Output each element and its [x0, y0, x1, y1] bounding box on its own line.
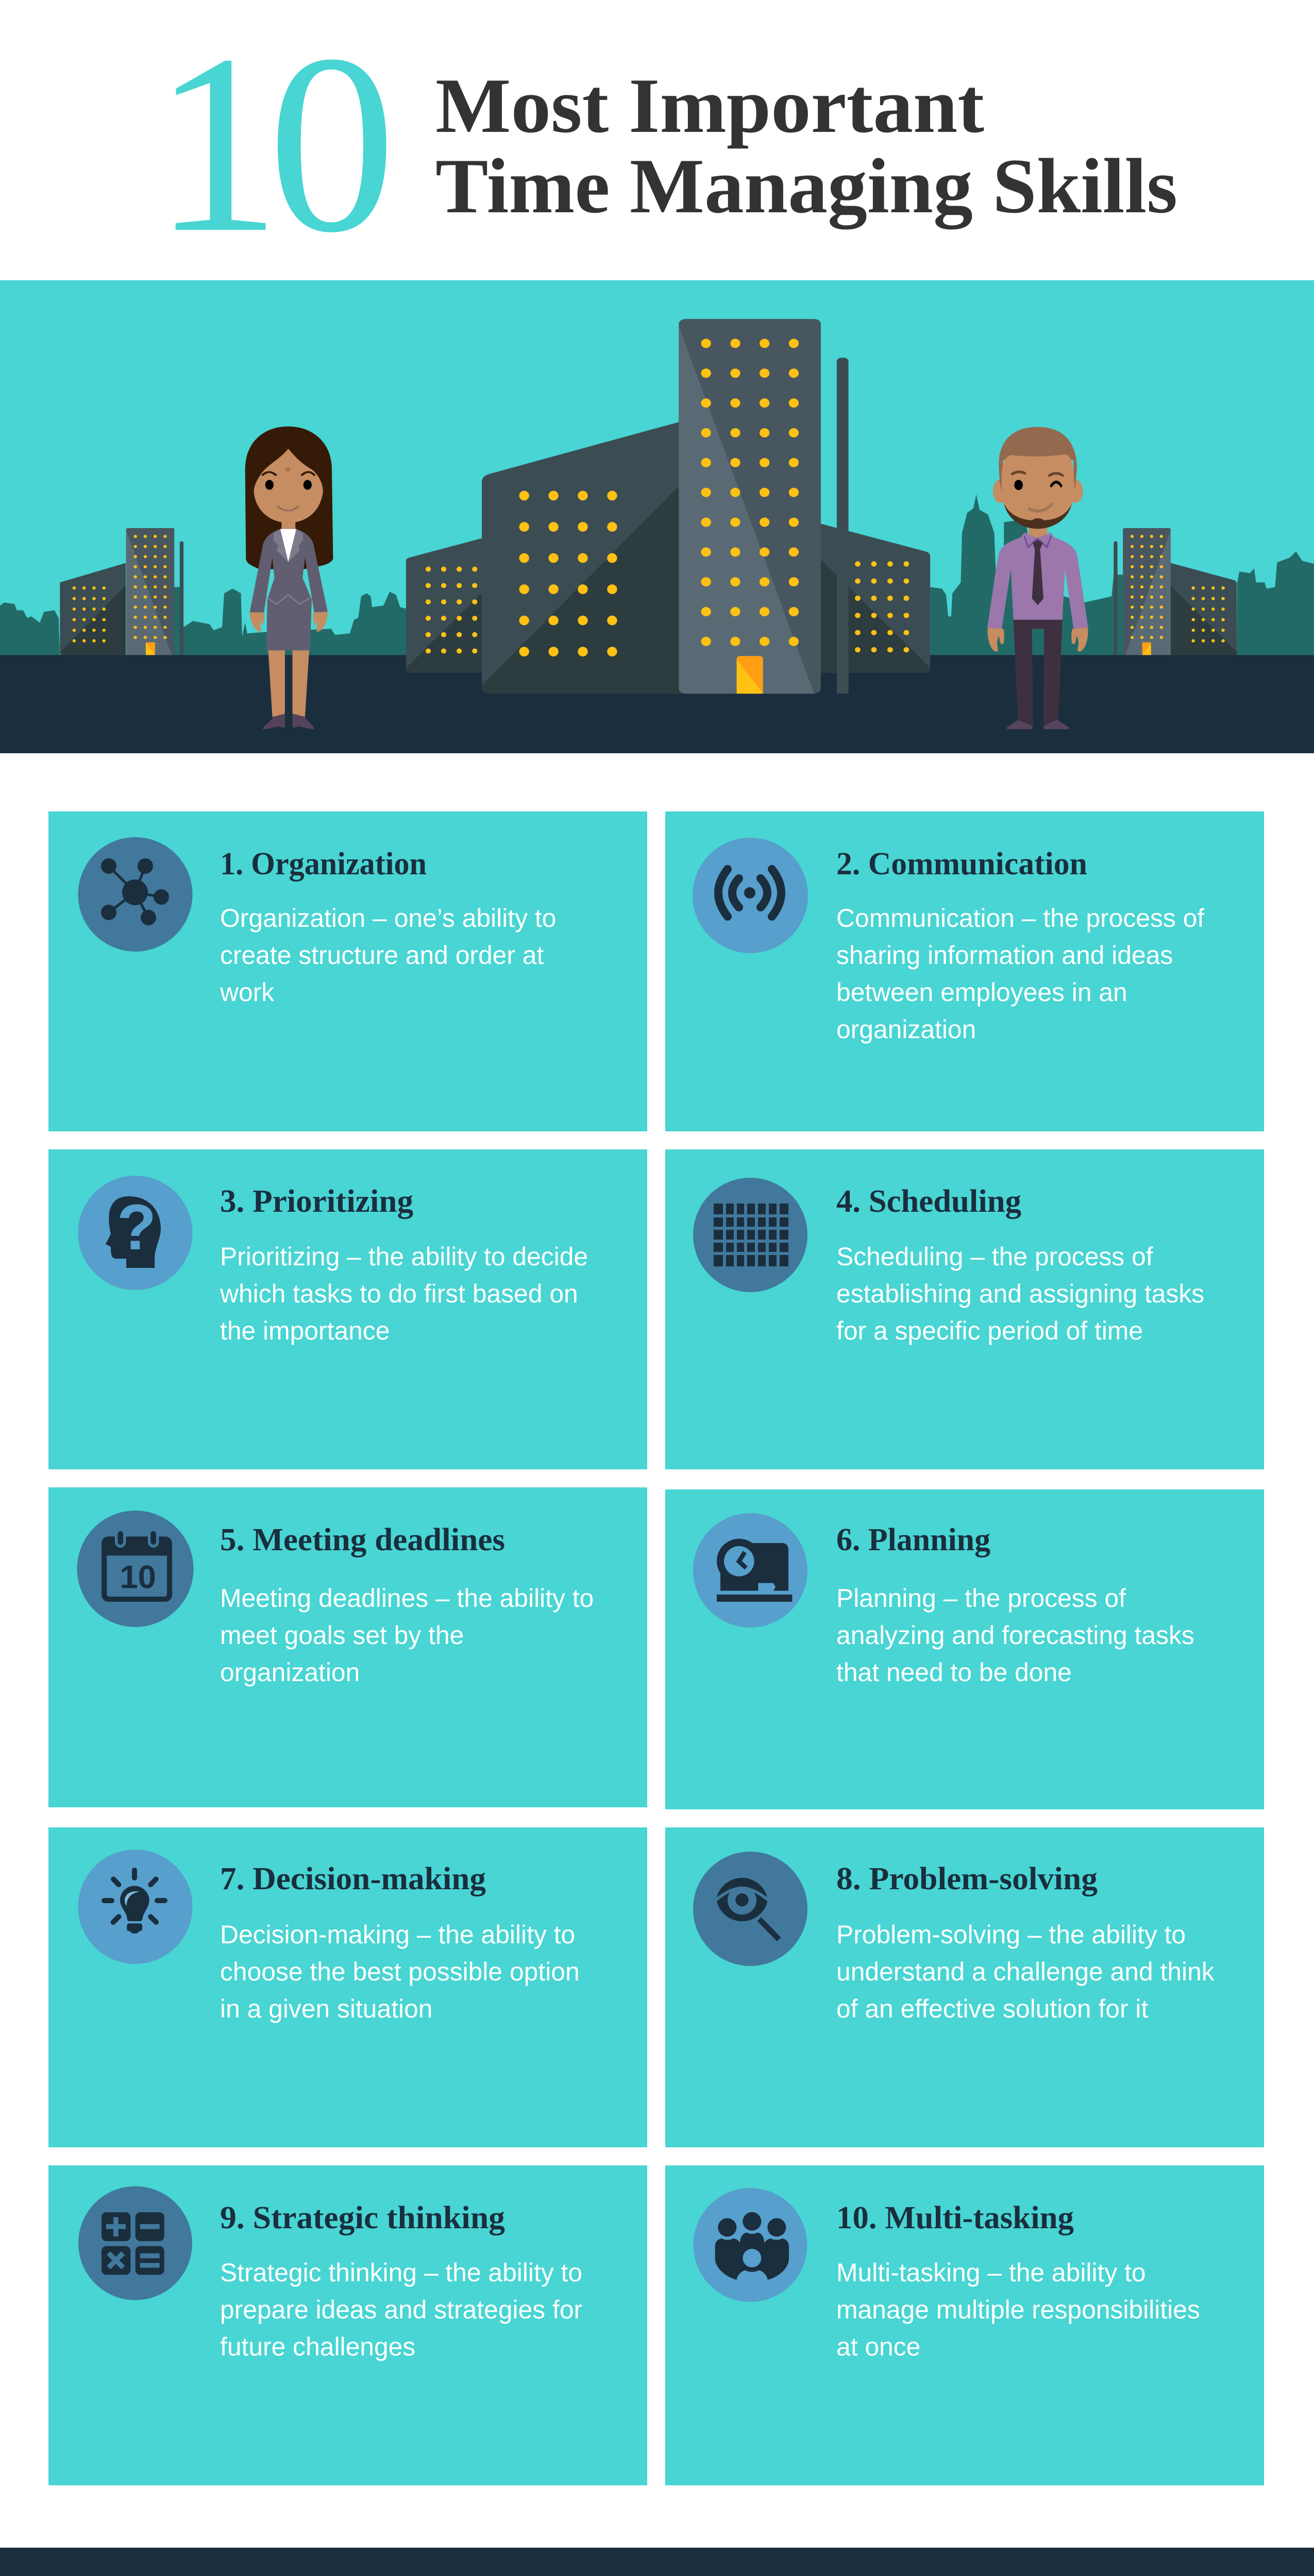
body text: Prioritizing – the ability to decide	[220, 1242, 588, 1271]
card 1: Organization	[48, 811, 647, 1131]
body text: analyzing and forecasting tasks	[836, 1621, 1194, 1650]
body text: Communication – the process of	[836, 904, 1204, 933]
shirt	[987, 533, 1088, 629]
body text: Organization – one’s ability to	[220, 904, 556, 933]
heading: 2. Communication	[836, 846, 1087, 882]
smile	[1029, 504, 1052, 511]
title line 2: Time Managing Skills	[435, 143, 1177, 230]
body text: sharing information and ideas	[836, 941, 1173, 970]
small tower right	[1123, 528, 1171, 655]
body text: meet goals set by the	[220, 1621, 464, 1650]
suit	[250, 529, 328, 650]
title	[153, 2, 1177, 285]
footer	[0, 2548, 1314, 2576]
body text: establishing and assigning tasks	[836, 1279, 1204, 1308]
low building right of tower	[816, 522, 930, 673]
tower door	[736, 656, 763, 693]
body text: organization	[220, 1658, 360, 1687]
body text: at once	[836, 2332, 920, 2361]
shoes	[1006, 720, 1069, 729]
collar	[1024, 536, 1051, 547]
body text: of an effective solution for it	[836, 1994, 1148, 2023]
icon: network	[78, 837, 193, 952]
body text: Decision-making – the ability to	[220, 1920, 575, 1949]
card 9: Strategic thinking	[48, 2165, 647, 2485]
heading: 4. Scheduling	[836, 1184, 1021, 1219]
woman character	[245, 427, 333, 729]
tall pole	[837, 358, 849, 693]
small low building right	[1171, 563, 1237, 655]
brows	[1012, 472, 1063, 476]
card 8: Problem-solving	[665, 1827, 1264, 2147]
body text: Problem-solving – the ability to	[836, 1920, 1186, 1949]
body text: manage multiple responsibilities	[836, 2295, 1200, 2324]
face	[1002, 454, 1074, 523]
body text: Meeting deadlines – the ability to	[220, 1584, 594, 1613]
card 2: Communication	[665, 811, 1264, 1131]
tall tower	[679, 319, 821, 693]
small pole right	[1114, 541, 1118, 655]
heading: 1. Organization	[220, 846, 427, 882]
icon: team of people	[694, 2188, 807, 2302]
icon: light bulb	[78, 1850, 193, 1964]
beard	[1004, 503, 1072, 529]
tie	[1032, 540, 1043, 605]
body text: for a specific period of time	[836, 1316, 1143, 1345]
heading: 9. Strategic thinking	[220, 2200, 505, 2235]
heading: 5. Meeting deadlines	[220, 1522, 505, 1557]
card 6: Planning	[665, 1489, 1264, 1809]
icon: calendar: 10	[120, 1560, 156, 1596]
body text: Planning – the process of	[836, 1584, 1126, 1613]
hands	[250, 612, 328, 632]
icon: eye magnifier	[693, 1852, 807, 1966]
neck	[1029, 520, 1047, 538]
body text: understand a challenge and think	[836, 1957, 1215, 1986]
trousers	[1014, 620, 1063, 727]
right half of city	[657, 319, 1314, 693]
body text: prepare ideas and strategies for	[220, 2295, 582, 2324]
big building continuation	[657, 421, 682, 693]
icon: clock on laptop	[693, 1513, 807, 1628]
icon: calendar	[77, 1511, 194, 1627]
legs	[268, 650, 309, 717]
card 3: Prioritizing	[48, 1149, 647, 1469]
body text: organization	[836, 1015, 976, 1044]
card 5: Meeting deadlines	[48, 1487, 647, 1807]
heading: 7. Decision-making	[220, 1861, 486, 1896]
icon: schedule grid	[693, 1178, 807, 1292]
card 4: Scheduling	[665, 1149, 1264, 1469]
small tower left	[126, 528, 174, 655]
neck	[281, 521, 295, 532]
body text: create structure and order at	[220, 941, 544, 970]
body text: Multi-tasking – the ability to	[836, 2258, 1146, 2287]
shoes	[263, 714, 314, 729]
icon: signal	[693, 838, 808, 953]
man character	[987, 427, 1088, 729]
big building	[482, 428, 657, 693]
skyline right	[930, 495, 1314, 655]
body text: in a given situation	[220, 1994, 432, 2023]
card 7: Decision-making	[48, 1827, 647, 2147]
small low building left	[60, 563, 126, 655]
body text: which tasks to do first based on	[220, 1279, 578, 1308]
body text: between employees in an	[836, 978, 1127, 1007]
heading: 8. Problem-solving	[836, 1861, 1098, 1896]
body text: Strategic thinking – the ability to	[220, 2258, 582, 2287]
ears	[993, 480, 1008, 503]
hair	[245, 427, 333, 569]
card 10: Multi-tasking	[665, 2165, 1264, 2485]
big number 10: 10	[153, 2, 396, 285]
hair	[999, 427, 1077, 491]
body text: choose the best possible option	[220, 1957, 580, 1986]
eyes	[1014, 480, 1023, 490]
heading: 6. Planning	[836, 1522, 990, 1557]
hero illustration: city scene	[0, 280, 1314, 753]
body text: Scheduling – the process of	[836, 1242, 1153, 1271]
heading: 10. Multi-tasking	[836, 2200, 1074, 2235]
skyline left	[0, 587, 407, 655]
mid low building left	[406, 538, 482, 673]
small pole left	[180, 541, 183, 655]
blouse	[280, 529, 296, 562]
body text: the importance	[220, 1316, 390, 1345]
lapels	[274, 529, 303, 563]
icon: head with question mark	[78, 1176, 193, 1290]
face	[254, 449, 323, 523]
title line 1: Most Important	[435, 62, 984, 149]
body text: that need to be done	[836, 1658, 1072, 1687]
left half of city	[0, 427, 657, 729]
hands	[987, 628, 1088, 652]
icon: calculator keys	[78, 2187, 192, 2300]
body text: future challenges	[220, 2332, 415, 2361]
heading: 3. Prioritizing	[220, 1184, 413, 1219]
icon: head with question mark: ?	[117, 1192, 156, 1263]
body text: work	[220, 978, 274, 1007]
skirt seam	[267, 595, 310, 604]
